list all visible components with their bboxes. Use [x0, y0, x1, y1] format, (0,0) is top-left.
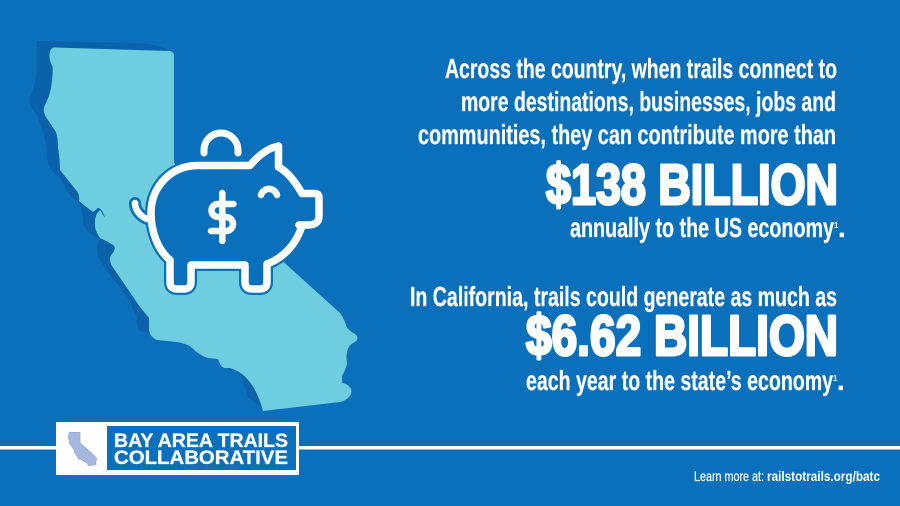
map shadow: north and west coast — [30, 41, 170, 334]
dollar sign — [211, 193, 234, 241]
logo name line 2: COLLABORATIVE — [114, 447, 288, 469]
pig eye — [261, 189, 277, 195]
period: . — [837, 365, 845, 396]
California map with pig illustration — [30, 41, 358, 411]
period: . — [838, 212, 846, 243]
logo name line 1: BAY AREA TRAILS — [114, 430, 288, 452]
footer divider line — [0, 446, 900, 450]
footnote marker: 1 — [833, 374, 838, 383]
logo blue panel — [107, 426, 296, 470]
California map — [44, 47, 357, 411]
coin slot arc — [204, 133, 238, 153]
URL: railstotrails.org/batc — [767, 468, 880, 484]
logo: Bay Area Trails Collaborative — [56, 422, 299, 475]
logo white plate — [56, 422, 299, 475]
pig tail — [135, 203, 147, 219]
text block: California economy — [410, 281, 845, 396]
learn more label: Learn more at: — [694, 468, 764, 484]
text block: US economy — [418, 53, 846, 243]
pig blue outline and fill — [135, 146, 319, 289]
learn more link text — [694, 468, 880, 484]
logo California icon — [68, 432, 97, 466]
pig body — [151, 146, 319, 289]
map shadow: south coast — [238, 372, 270, 408]
icon: piggy bank — [135, 133, 319, 289]
footnote marker: 1 — [834, 221, 839, 230]
